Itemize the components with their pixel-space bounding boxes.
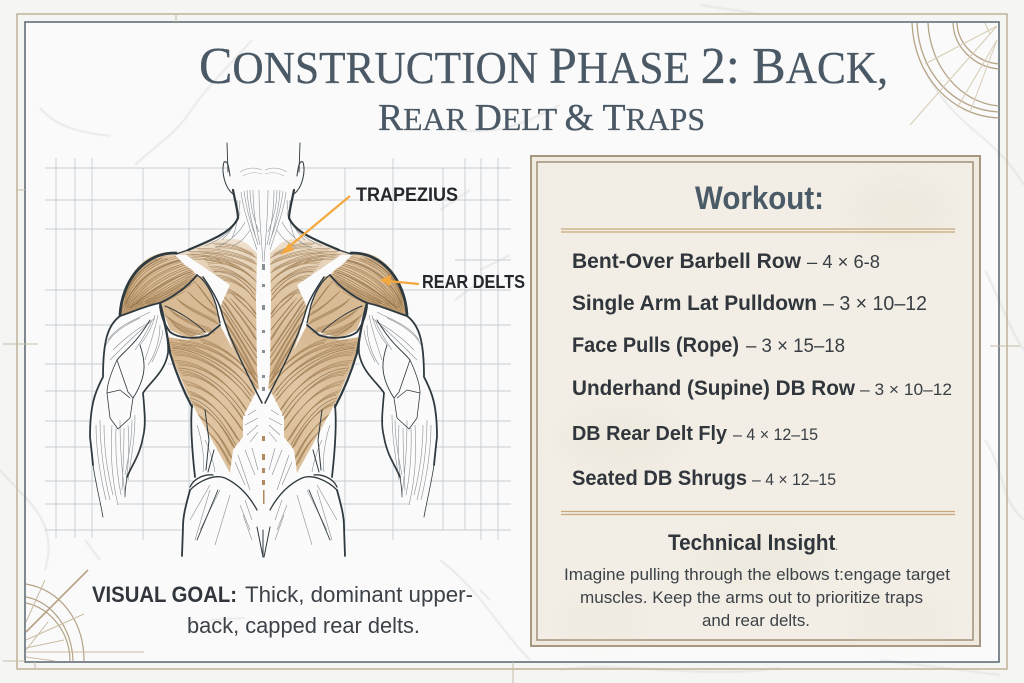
row: face pulls: Face Pulls (Rope) <box>572 334 739 357</box>
insight text: Imagine pulling through the elbows t:engage target <box>564 566 950 584</box>
row: db rear delt fly: – 4 × 12–15 <box>733 425 818 444</box>
label: trapezius: TRAPEZIUS <box>356 185 458 206</box>
visual goal text: VISUAL GOAL: <box>92 582 237 607</box>
row: bent-over barbell row: Bent-Over Barbell Row <box>572 250 802 273</box>
darker fibre accents <box>125 258 257 445</box>
right half of figure <box>263 140 437 557</box>
left half of figure <box>90 140 264 557</box>
label: rear delts: REAR DELTS <box>422 272 525 292</box>
heading: workout: Workout: <box>695 180 824 216</box>
row: seated db shrugs: Seated DB Shrugs <box>572 467 747 490</box>
row: underhand db row: – 3 × 10–12 <box>860 380 952 399</box>
title line 1: CONSTRUCTION PHASE 2: BACK, <box>199 38 888 95</box>
visual goal text: back, capped rear delts. <box>187 613 420 638</box>
row: seated db shrugs <box>572 467 836 490</box>
body outline <box>90 143 264 557</box>
corner ornament: top right <box>910 23 999 125</box>
neck and arm fibres <box>96 168 263 545</box>
heading: technical insight: Technical Insight. <box>668 530 838 555</box>
row: face pulls: – 3 × 15–18 <box>746 336 845 357</box>
latissimus dorsi <box>167 325 258 473</box>
arrow: rear delts <box>380 275 419 286</box>
insight text: muscles. Keep the arms out to prioritize traps <box>580 589 923 607</box>
row: single arm lat pulldown: Single Arm Lat Pulldown <box>572 292 817 315</box>
corner ornament: bottom left <box>26 570 144 661</box>
row: underhand db row: Underhand (Supine) DB Row <box>572 377 856 400</box>
row: db rear delt fly <box>572 423 818 445</box>
spine markers <box>262 264 265 504</box>
title <box>199 38 888 139</box>
infraspinatus and teres <box>160 275 220 338</box>
arrow: trapezius <box>280 196 350 255</box>
visual goal text <box>92 582 473 638</box>
visual goal text: Thick, dominant upper- <box>245 582 473 607</box>
title line 2: REAR DELT & TRAPS <box>378 97 705 139</box>
row: seated db shrugs: – 4 × 12–15 <box>752 470 836 489</box>
insight text: and rear delts. <box>702 612 810 630</box>
deltoid <box>120 252 197 317</box>
panel: workout <box>531 156 980 646</box>
anatomy figure: back muscles <box>90 140 437 557</box>
blueprint grid <box>45 158 511 540</box>
row: bent-over barbell row: – 4 × 6-8 <box>807 252 880 272</box>
exercise list <box>572 250 952 490</box>
row: face pulls <box>572 334 845 357</box>
scapula <box>175 255 230 307</box>
row: single arm lat pulldown <box>572 292 927 315</box>
row: single arm lat pulldown: – 3 × 10–12 <box>823 293 927 315</box>
body silhouette <box>90 140 264 557</box>
trapezius <box>176 239 259 390</box>
row: db rear delt fly: DB Rear Delt Fly <box>572 423 728 445</box>
insight text <box>564 566 950 630</box>
muscle fibres <box>120 243 260 468</box>
